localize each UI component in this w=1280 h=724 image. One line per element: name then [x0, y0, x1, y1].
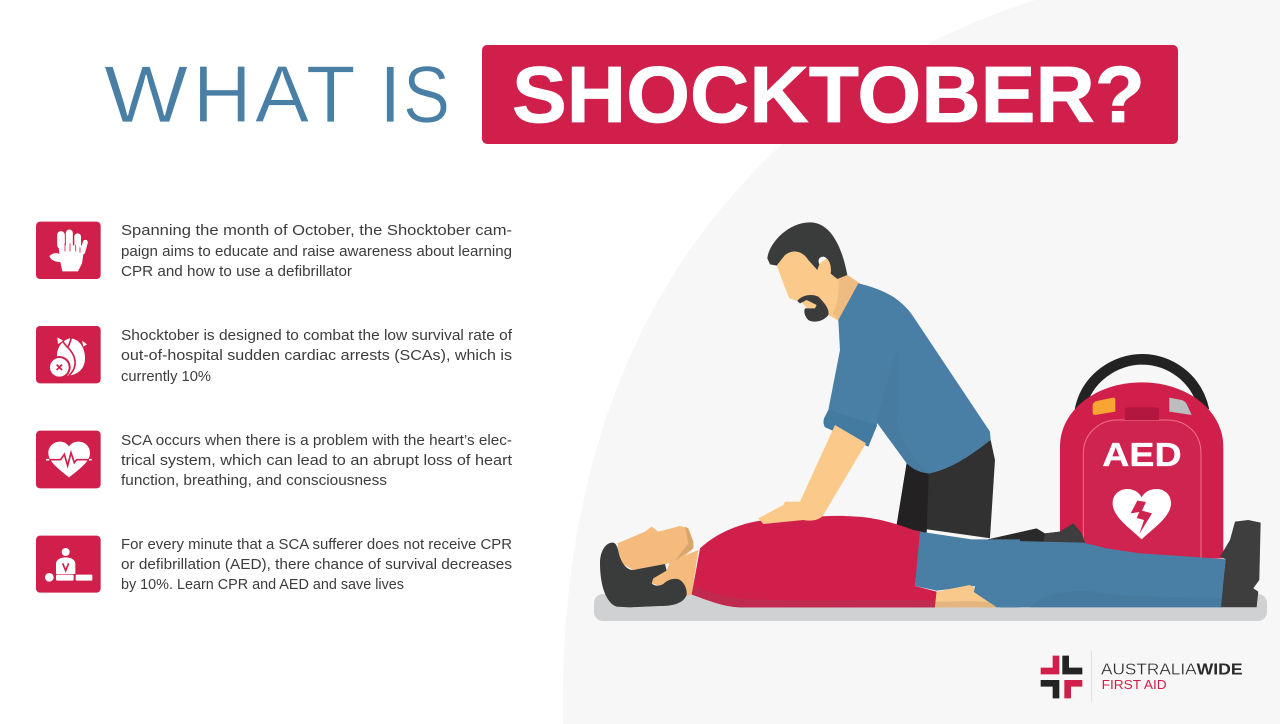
- text block 2: [121, 328, 513, 385]
- floor mat: [594, 594, 1267, 621]
- logo text: [1101, 661, 1243, 692]
- patient lying down: [600, 516, 1020, 607]
- patient hair: [600, 543, 687, 607]
- patient face shadow: [675, 527, 693, 561]
- text block 1: Spanning the month of October, the Shocktober cam-: [121, 223, 512, 239]
- text block 4: by 10%. Learn CPR and AED and save lives: [121, 577, 404, 593]
- list item 1: [36, 222, 512, 280]
- patient neck: [652, 550, 698, 595]
- text block 4: or defibrillation (AED), there chance of survival decreases: [121, 557, 512, 573]
- icon: CPR: [36, 536, 101, 593]
- patient trousers upper: [915, 532, 1020, 607]
- text block 2: Shocktober is designed to combat the low survival rate of: [121, 328, 513, 344]
- title badge: SHOCKTOBER?: [512, 50, 1145, 139]
- text block 2: out-of-hospital sudden cardiac arrests (SCAs), which is: [121, 348, 512, 364]
- icon: hand: [36, 222, 101, 279]
- patient trousers and boot: [1000, 520, 1261, 607]
- text block 4: [121, 537, 512, 593]
- text block 3: [121, 433, 512, 489]
- text block 3: SCA occurs when there is a problem with the heart’s elec-: [121, 433, 512, 449]
- text block 3: function, breathing, and consciousness: [121, 473, 387, 489]
- list item 2: [36, 326, 513, 385]
- title: what is: W: [104, 50, 189, 140]
- title: what is: T: [306, 50, 355, 140]
- title: what is: S: [403, 50, 450, 140]
- text block 3: trical system, which can lead to an abrupt loss of heart: [121, 453, 512, 469]
- rescuer arm and hand: [758, 425, 866, 524]
- text block 2: currently 10%: [121, 369, 211, 385]
- patient face: [617, 526, 693, 570]
- title: what is: [104, 50, 450, 140]
- rescuer torso: [823, 283, 991, 473]
- text block 1: [121, 223, 512, 280]
- text block 1: CPR and how to use a defibrillator: [121, 264, 352, 280]
- rescuer foot: [985, 523, 1085, 547]
- rescuer legs: [897, 440, 995, 538]
- title: what is: H: [193, 50, 252, 140]
- list item 4: [36, 536, 512, 593]
- patient shirt shadow: [692, 585, 936, 607]
- logo text: FIRST AID: [1102, 677, 1167, 692]
- illustration: CPR scene: [594, 222, 1267, 621]
- logo text: AUSTRALIA: [1101, 661, 1198, 678]
- icon: heart with pulse: [36, 431, 101, 488]
- title: [104, 45, 1178, 144]
- patient shirt: [692, 516, 937, 607]
- title: what is: A: [255, 50, 309, 140]
- icon: heart with cross: [36, 326, 101, 383]
- list item 3: [36, 431, 512, 489]
- logo: [1041, 651, 1243, 702]
- logo mark: [1041, 656, 1082, 698]
- text block 1: paign aims to educate and raise awareness about learning: [121, 244, 512, 260]
- AED device: [1060, 359, 1223, 558]
- logo text: WIDE: [1197, 661, 1243, 678]
- patient hand: [935, 585, 997, 607]
- rescuer head: [767, 222, 860, 322]
- text block 4: For every minute that a SCA sufferer does not receive CPR: [121, 537, 512, 553]
- rescuer: [767, 222, 1085, 547]
- title: what is: I: [379, 50, 402, 140]
- AED device: AED: [1102, 436, 1182, 473]
